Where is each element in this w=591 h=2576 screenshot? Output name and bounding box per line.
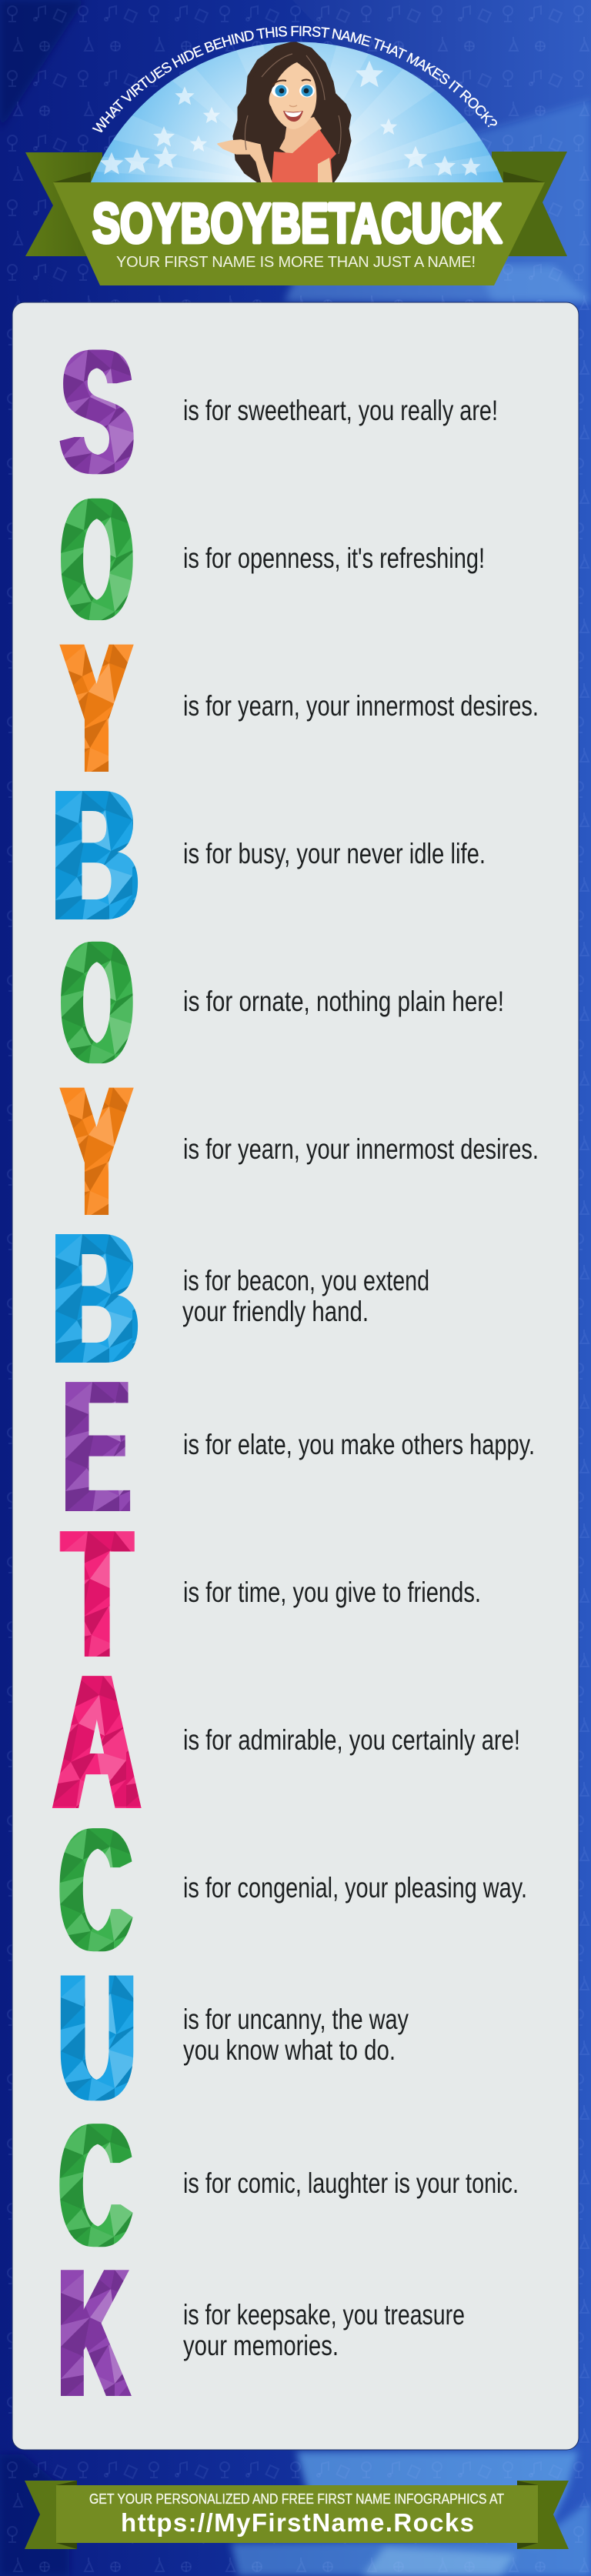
letter Y 2 — [59, 1088, 134, 1215]
letter A — [52, 1676, 142, 1808]
hair — [235, 44, 349, 182]
letter B 2 — [55, 1234, 139, 1363]
letter Y — [59, 645, 134, 772]
face — [269, 62, 316, 129]
letter S — [60, 349, 134, 474]
text U — [183, 2004, 409, 2066]
shirt — [272, 129, 336, 182]
text B: is for busy, your never idle life. — [183, 838, 486, 869]
letter C 2 — [59, 2124, 132, 2247]
letter C — [59, 1828, 132, 1951]
arms and hand — [218, 140, 272, 182]
text B 2: your friendly hand. — [182, 1296, 369, 1327]
curved tagline: WHAT VIRTUES HIDE BEHIND THIS FIRST NAME THAT MAKES IT ROCK? — [92, 26, 497, 132]
row E — [50, 1374, 535, 1520]
row C — [45, 1820, 527, 1966]
footer ribbon tails — [25, 2481, 569, 2549]
letter O 2 — [61, 942, 133, 1063]
text K: your memories. — [183, 2330, 339, 2361]
row O — [45, 490, 485, 636]
row S — [45, 342, 498, 488]
text S: is for sweetheart, you really are! — [183, 395, 498, 426]
woman illustration — [218, 44, 349, 182]
text U: you know what to do. — [183, 2034, 396, 2066]
text B 2: is for beacon, you extend — [183, 1265, 429, 1296]
letter T — [60, 1531, 135, 1657]
row Y 2 — [44, 1079, 539, 1226]
subtitle: YOUR FIRST NAME IS MORE THAN JUST A NAME! — [116, 254, 476, 271]
row T — [45, 1523, 481, 1670]
letter K — [60, 2270, 132, 2396]
letter E — [65, 1382, 131, 1511]
footer ribbon — [25, 2481, 569, 2549]
text U: is for uncanny, the way — [183, 2004, 409, 2035]
neck and shoulder — [279, 117, 322, 155]
footer call to action: GET YOUR PERSONALIZED AND FREE FIRST NAME INFOGRAPHICS AT — [89, 2491, 504, 2507]
text O: is for openness, it's refreshing! — [183, 542, 485, 574]
footer url: https://MyFirstName.Rocks — [121, 2508, 474, 2537]
mouth — [283, 105, 303, 122]
text B 2 — [182, 1265, 429, 1327]
row K — [60, 2270, 464, 2396]
text O 2: is for ornate, nothing plain here! — [183, 986, 504, 1017]
row Y — [44, 636, 539, 782]
main panel — [12, 302, 579, 2450]
header ribbon back tails — [25, 152, 567, 256]
row B — [40, 783, 486, 929]
letter O — [61, 499, 133, 620]
row U — [45, 1967, 409, 2113]
sunburst dome — [91, 42, 503, 182]
eyes — [272, 80, 315, 97]
letter B — [55, 791, 139, 919]
row B 2 — [40, 1226, 429, 1373]
row C 2 — [45, 2115, 519, 2261]
text K — [183, 2299, 465, 2361]
row O 2 — [45, 933, 504, 1079]
header main ribbon — [53, 182, 545, 285]
footer ribbon band — [56, 2485, 538, 2543]
hair highlights — [245, 54, 341, 154]
row A — [34, 1668, 520, 1818]
text K: is for keepsake, you treasure — [183, 2299, 465, 2331]
text T: is for time, you give to friends. — [183, 1577, 481, 1608]
letter U — [60, 1976, 134, 2101]
